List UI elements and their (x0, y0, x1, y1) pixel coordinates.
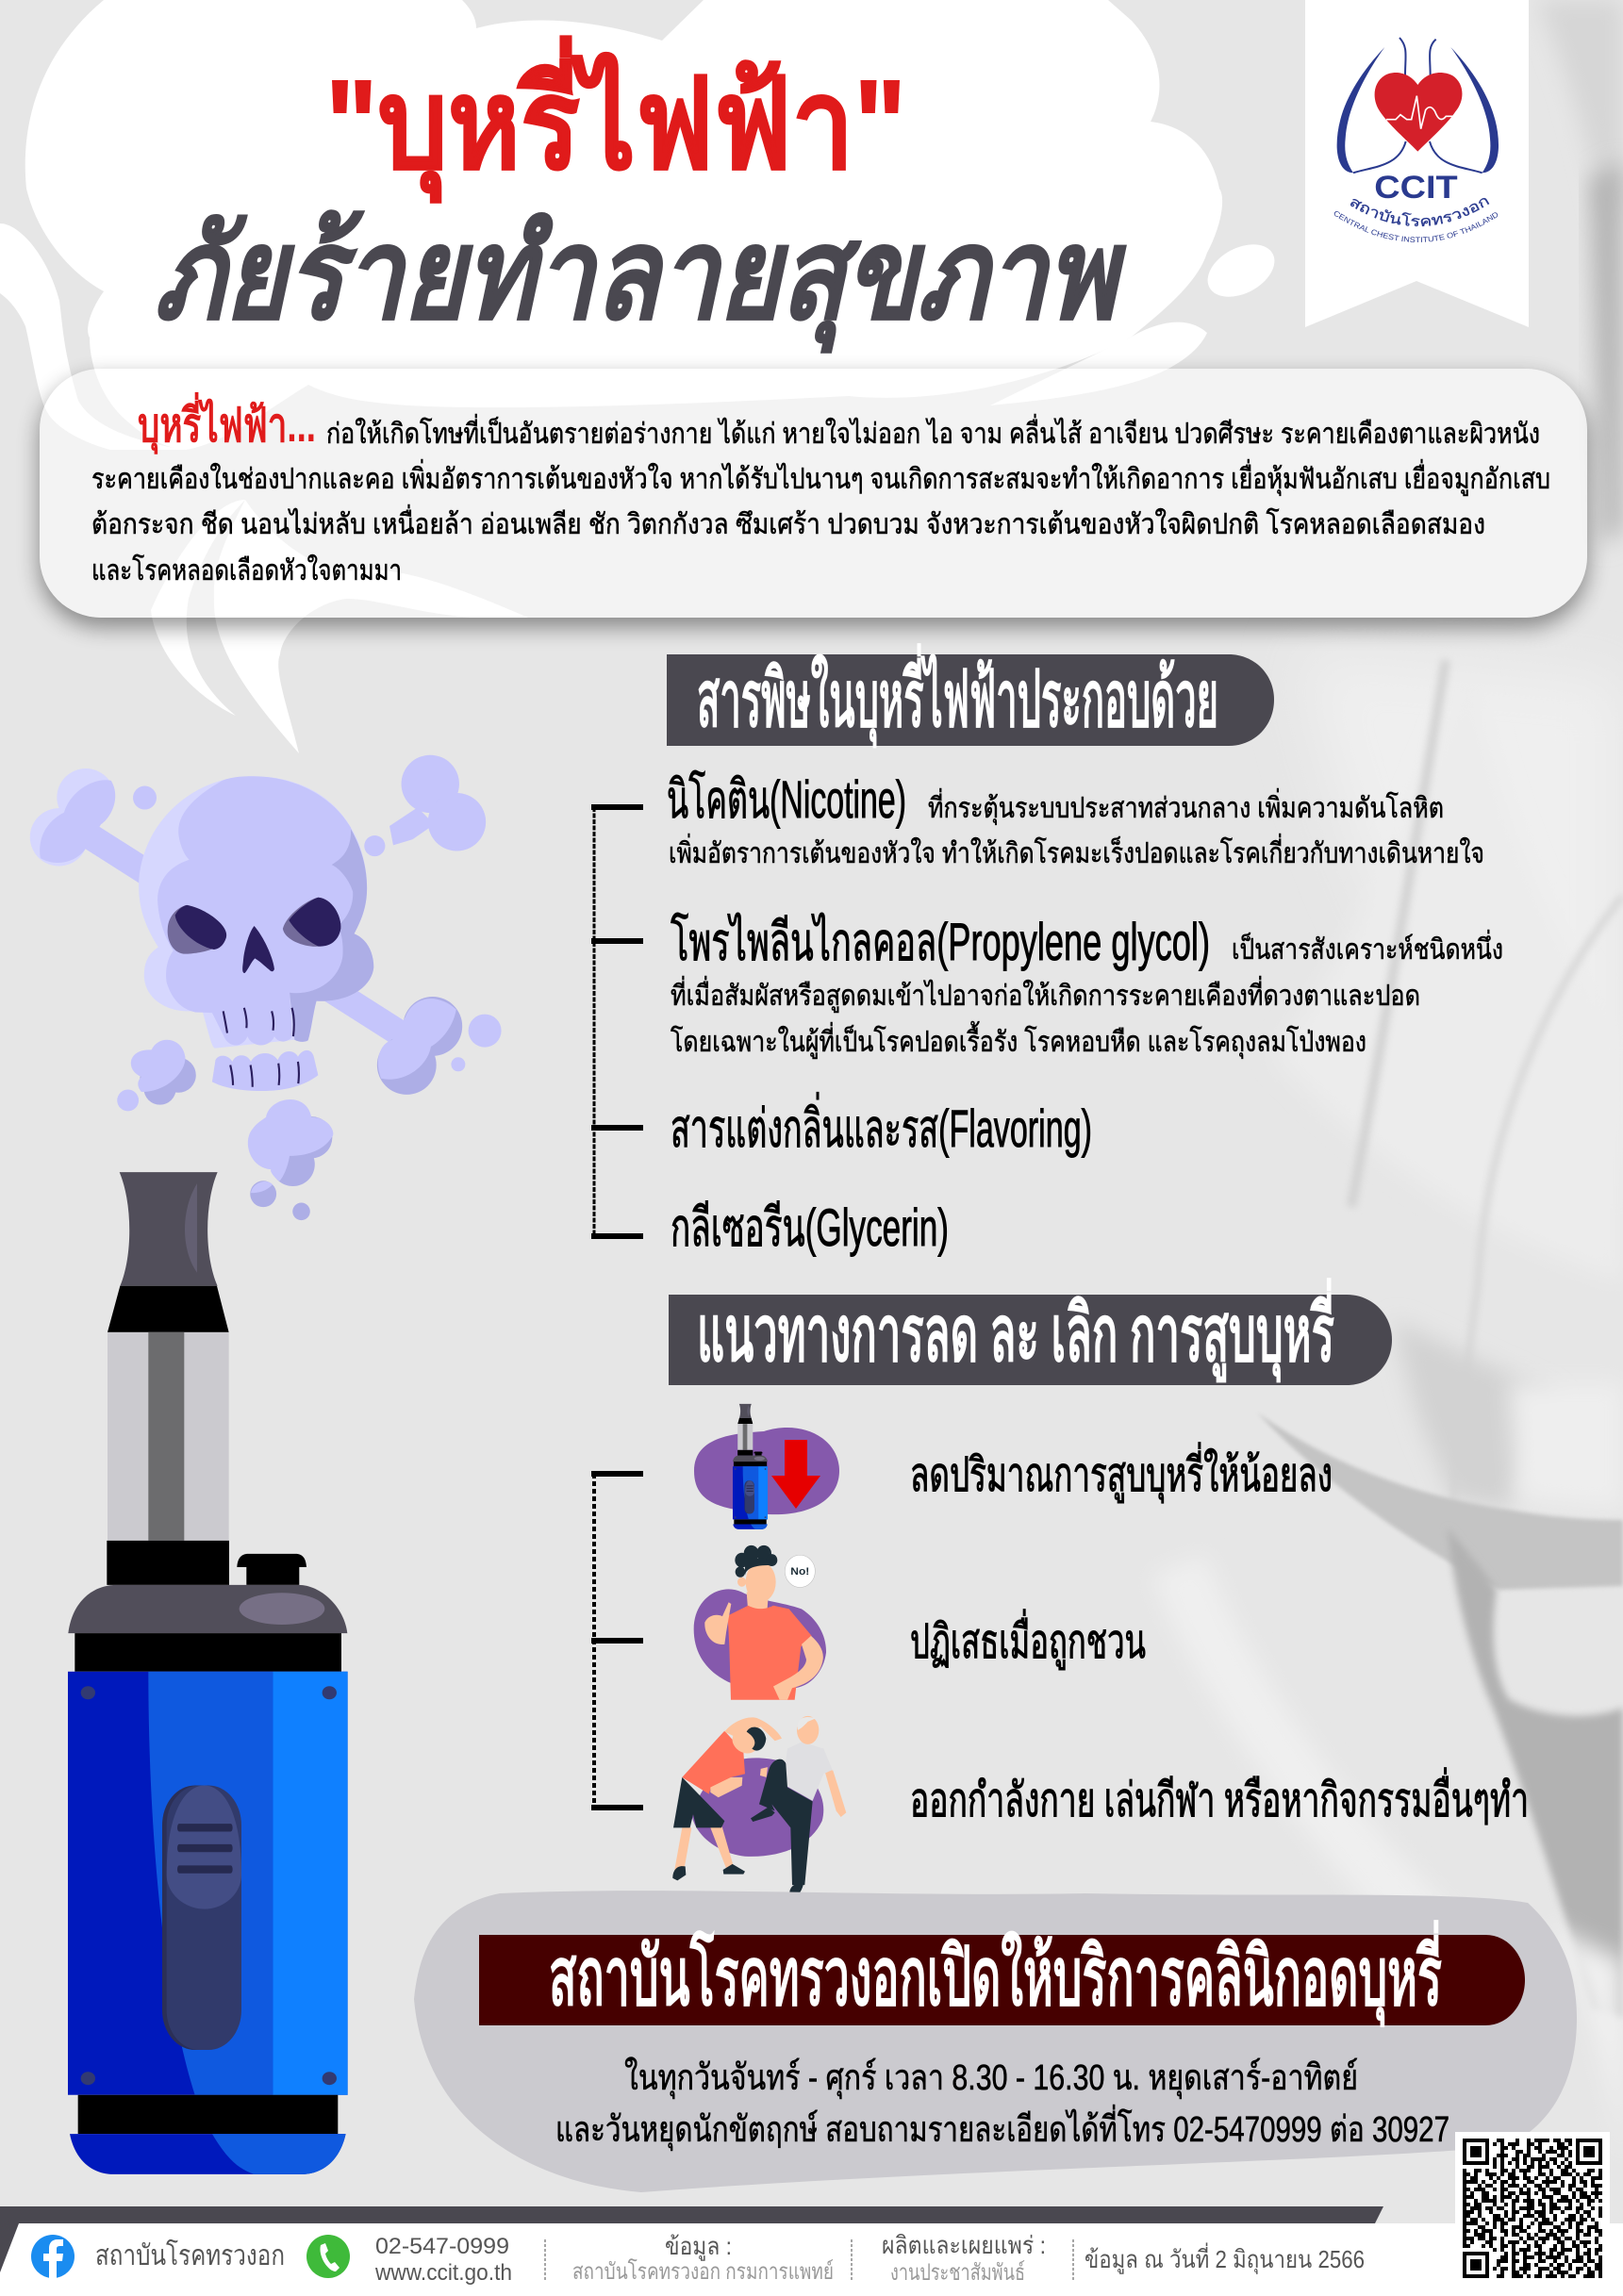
toxin: propylene glycol: โพรไพลีนไกลคอล(Propylene glycol) (671, 912, 1210, 971)
footer (0, 2206, 1623, 2296)
panel: clinic info (414, 1891, 1577, 2192)
heading: toxins (667, 643, 1274, 749)
facebook name: สถาบันโรคทรวงอก (95, 2238, 285, 2271)
logo: lungs and heart: สถาบันโรคทรวงอก (1350, 198, 1490, 226)
data source (572, 2232, 834, 2285)
panel: introduction (40, 369, 1587, 627)
toxin: nicotine: ที่กระตุ้นระบบประสาทส่วนกลาง เพิ่มความดันโลหิต (928, 788, 1444, 826)
publisher: งานประชาสัมพันธ์ (890, 2259, 1025, 2286)
icon: facebook (31, 2235, 75, 2278)
toxin: glycerin: กลีเซอรีน(Glycerin) (671, 1198, 949, 1257)
icon: skull and crossbones (30, 755, 502, 1220)
smoke puffs (117, 1040, 333, 1220)
icon: man refusing: No! (790, 1567, 809, 1577)
toxin: flavoring: สารแต่งกลิ่นและรส(Flavoring) (671, 1092, 1092, 1158)
way: refuse when invited: ปฏิเสธเมื่อถูกชวน (910, 1610, 1146, 1670)
phone and web: 02-547-0999 (375, 2234, 509, 2259)
subtitle: health destroying danger: ภัยร้ายทำลายสุขภาพ (147, 203, 1141, 354)
publisher: ผลิตและเผยแพร่ : (882, 2231, 1046, 2259)
logo: lungs and heart (1333, 37, 1499, 242)
intro body: และโรคหลอดเลือดหัวใจตามมา (91, 553, 402, 586)
data source: สถาบันโรคทรวงอก กรมการแพทย์ (572, 2258, 834, 2285)
icon: people exercising (672, 1716, 846, 1898)
icon: man refusing (694, 1545, 826, 1700)
icon: phone (306, 2235, 350, 2278)
heading: ways to quit (669, 1278, 1392, 1385)
intro lead: บุหรี่ไฟฟ้า... (138, 392, 316, 454)
phone and web: www.ccit.go.th (374, 2260, 512, 2286)
QR code (1455, 2132, 1610, 2296)
phone and web (374, 2234, 512, 2286)
toxin: propylene glycol: ที่เมื่อสัมผัสหรือสูดดมเข้าไปอาจก่อให้เกิดการระคายเคืองที่ดวงตาและปอด (671, 976, 1420, 1013)
data source: ข้อมูล : (665, 2232, 732, 2261)
skull (139, 776, 373, 1091)
smoke cloud (0, 0, 1283, 753)
toxin: propylene glycol: เป็นสารสังเคราะห์ชนิดหนึ่ง (1232, 930, 1503, 966)
icon: reduce vaping (694, 1404, 839, 1529)
data date: ข้อมูล ณ วันที่ 2 มิถุนายน 2566 (1085, 2242, 1365, 2274)
clinic hours: ในทุกวันจันทร์ - ศุกร์ เวลา 8.30 - 16.30 น. หยุดเสาร์-อาทิตย์ (624, 2057, 1358, 2099)
logo: lungs and heart: CCIT (1374, 170, 1458, 206)
intro body (91, 414, 1550, 586)
way: reduce smoking: ลดปริมาณการสูบบุหรี่ให้น้อยลง (910, 1443, 1333, 1503)
toxin: propylene glycol (671, 912, 1503, 1060)
ribbon with CCIT logo (1305, 0, 1529, 327)
toxin: nicotine: นิโคติน(Nicotine) (667, 769, 906, 829)
toxin: propylene glycol: โดยเฉพาะในผู้ที่เป็นโรคปอดเรื้อรัง โรคหอบหืด และโรคถุงลมโป่งพอง (671, 1021, 1366, 1060)
publisher (882, 2231, 1046, 2286)
bracket: toxins list (591, 807, 643, 1236)
bracket: ways list (591, 1474, 643, 1808)
logo: lungs and heart: CENTRAL CHEST INSTITUTE OF THAILAND (1333, 211, 1498, 242)
title: electronic cigarette: "บุหรี่ไฟฟ้า" (325, 35, 906, 203)
toxin: nicotine (667, 769, 1484, 869)
illustration: vape device (68, 1172, 348, 2174)
